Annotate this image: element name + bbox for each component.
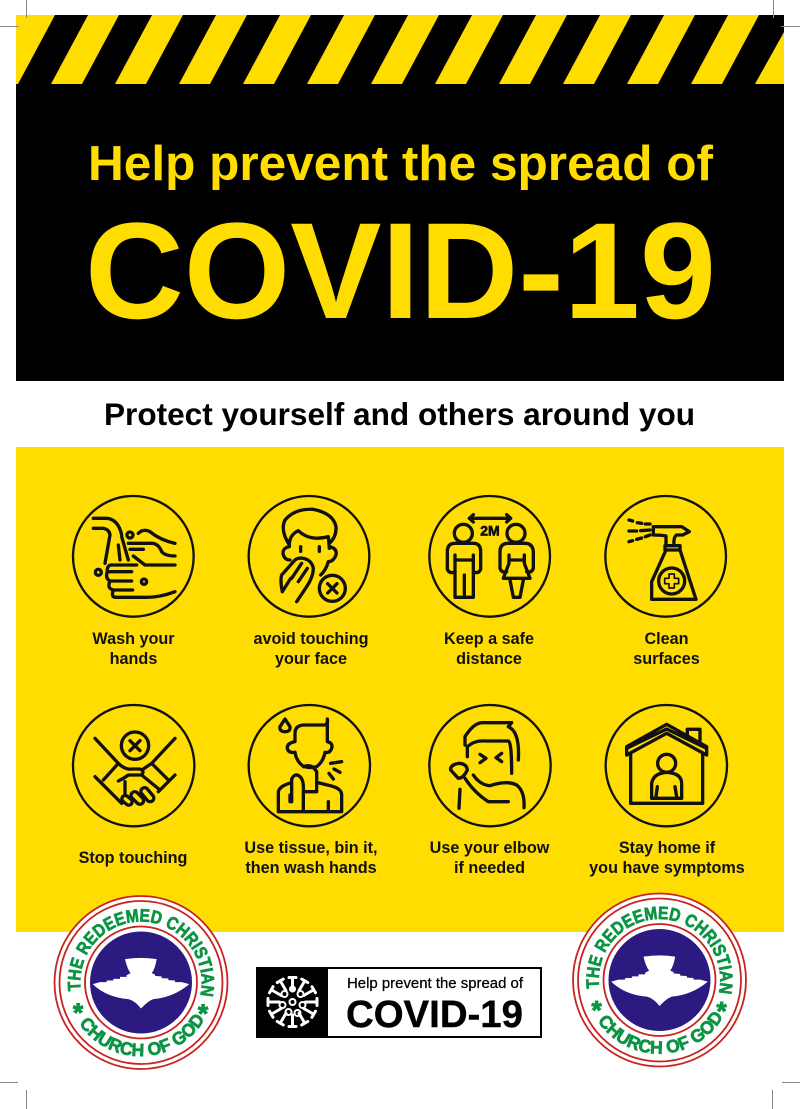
hazard stripes	[16, 15, 784, 84]
label: avoid touching your face: avoid touching	[253, 630, 369, 648]
panel: advice grid	[16, 447, 784, 932]
seal star right: *	[198, 998, 209, 1028]
icon: clean surfaces spray bottle	[605, 496, 726, 617]
subheading: Protect yourself and others around you	[104, 396, 695, 432]
seal stars: *	[73, 998, 84, 1028]
label: use tissue: then wash hands	[245, 859, 377, 877]
logo: left church seal	[54, 895, 228, 1070]
icon: use your elbow	[429, 705, 551, 826]
icon: virus	[268, 978, 317, 1026]
label: avoid touching your face: your face	[275, 650, 347, 668]
label: wash your hands: Wash your	[92, 630, 175, 648]
icon: stay home	[606, 705, 727, 826]
label: use your elbow: Use your elbow	[430, 839, 549, 857]
label: clean surfaces: surfaces	[633, 650, 700, 668]
label: use your elbow: if needed	[454, 859, 525, 877]
footer badge	[256, 967, 541, 1038]
icon: keep a safe distance	[429, 496, 550, 617]
seal stars: *	[591, 995, 602, 1025]
header title: COVID-19	[85, 195, 716, 348]
label: stay home: you have symptoms	[589, 859, 745, 877]
label: stop touching: Stop touching	[79, 849, 187, 867]
label: keep a safe distance: Keep a safe	[444, 630, 534, 648]
icon: wash your hands	[73, 496, 194, 617]
label: keep a safe distance: distance	[456, 650, 522, 668]
label: stay home: Stay home if	[619, 839, 715, 857]
icon: tissue and cough	[249, 705, 370, 826]
badge title: COVID-19	[346, 993, 523, 1036]
badge subtitle: Help prevent the spread of	[347, 976, 524, 992]
seal star right: *	[716, 996, 727, 1026]
label: use tissue: Use tissue, bin it,	[244, 839, 378, 857]
seal text bottom: CHURCH OF GOD	[81, 1014, 203, 1057]
dove	[93, 958, 189, 1008]
seal text top: THE REDEEMED CHRISTIAN	[67, 908, 214, 997]
seal text bottom: CHURCH OF GOD	[600, 1012, 722, 1054]
header panel	[16, 15, 784, 381]
icon: stop touching handshake	[73, 705, 194, 826]
label: wash your hands: hands	[110, 650, 157, 668]
icon: keep a safe distance: 2M	[480, 522, 500, 538]
dove	[611, 955, 708, 1006]
icon: avoid touching your face	[249, 496, 369, 617]
seal text top: THE REDEEMED CHRISTIAN	[586, 906, 733, 994]
header subtitle: Help prevent the spread of	[88, 136, 714, 191]
label: clean surfaces: Clean	[644, 630, 689, 648]
logo: right church seal	[572, 892, 747, 1068]
